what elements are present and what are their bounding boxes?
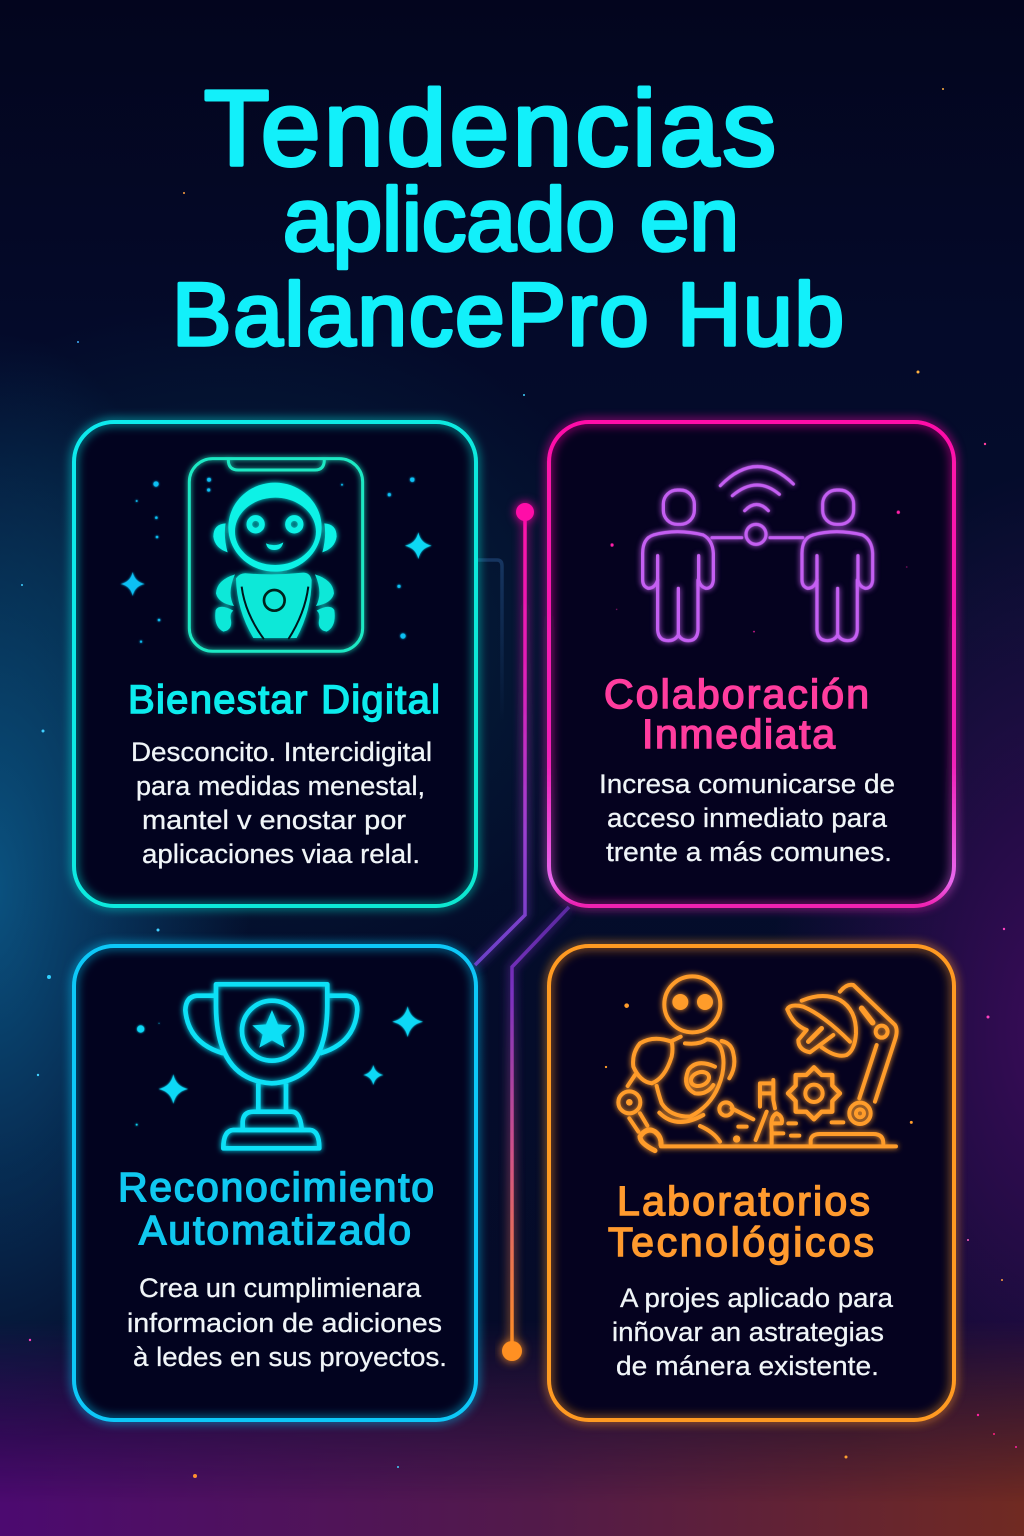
heading: Colaboración (604, 671, 869, 717)
pink specks (610, 511, 907, 632)
description: Crea un cumplimienara (139, 1273, 422, 1303)
icon: two people connected by wifi (643, 467, 873, 641)
description (127, 1273, 447, 1372)
description (612, 1283, 894, 1381)
description: A projes aplicado para (620, 1283, 894, 1313)
heading: Automatizado (139, 1207, 411, 1253)
connector: colaboración card to orange node (502, 907, 569, 1361)
heading (608, 1178, 874, 1265)
title: Tendencias (204, 68, 776, 188)
description (599, 769, 895, 867)
icon: trophy with star (185, 984, 357, 1148)
description: à ledes en sus proyectos. (133, 1342, 447, 1372)
panel: Bienestar Digital (74, 422, 476, 906)
card frame (549, 946, 954, 1420)
description: aplicaciones viaa relal. (142, 839, 420, 869)
heading: Inmediata (642, 711, 835, 757)
panel: Colaboración Inmediata (549, 422, 954, 906)
description: Desconcito. Intercidigital (131, 737, 432, 767)
icon: robot in frame (189, 459, 363, 651)
description: informacion de adiciones (127, 1308, 442, 1338)
panel: Reconocimiento Automatizado (74, 946, 476, 1420)
description: Incresa comunicarse de (599, 769, 895, 799)
title: BalancePro Hub (172, 264, 844, 364)
description: acceso inmediato para (607, 803, 888, 833)
heading (604, 671, 869, 757)
panel: Laboratorios Tecnológicos (549, 946, 954, 1420)
description: trente a más comunes. (606, 837, 892, 867)
heading: Laboratorios (617, 1178, 870, 1224)
heading (118, 1164, 434, 1253)
sparkles and dots (136, 1006, 423, 1126)
title: aplicado en (283, 169, 739, 269)
orange specks (605, 1003, 913, 1124)
faint connector (478, 560, 502, 722)
description (131, 737, 432, 869)
connector: magenta node to reconocimiento card (475, 503, 534, 965)
description: de mánera existente. (616, 1351, 879, 1381)
card frame (74, 946, 476, 1420)
heading: Tecnológicos (608, 1219, 874, 1265)
description: inñovar an astrategias (612, 1317, 884, 1347)
title (172, 68, 844, 364)
card frame (74, 422, 476, 906)
description: mantel v enostar por (142, 805, 406, 835)
heading: Reconocimiento (118, 1164, 434, 1210)
sparkles and dots (121, 477, 432, 643)
description: para medidas menestal, (136, 771, 425, 801)
icon: robot in lab with lamp and gear (618, 976, 897, 1151)
card frame (549, 422, 954, 906)
heading: Bienestar Digital (128, 678, 440, 722)
